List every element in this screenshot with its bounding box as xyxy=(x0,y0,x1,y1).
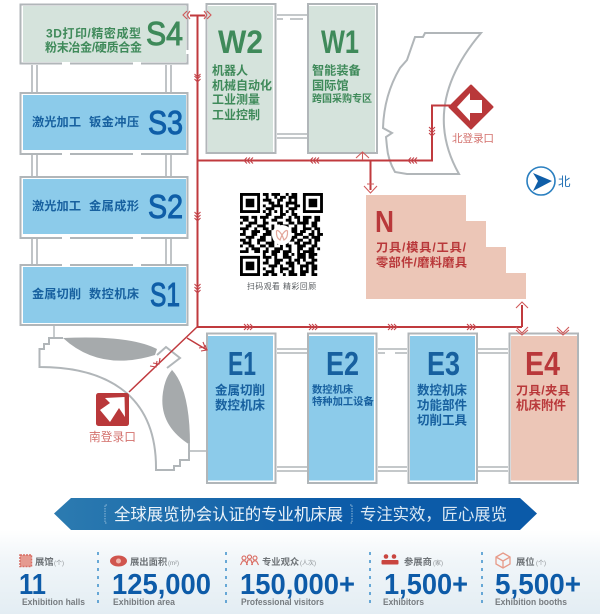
panel: hall S4: S4 xyxy=(146,15,183,52)
icon: halls xyxy=(20,555,32,566)
stat: exhibition area: 展出面积 xyxy=(130,556,168,567)
panel: hall S3: 钣金冲压 xyxy=(89,114,139,129)
panel: hall W1 xyxy=(308,4,377,153)
panel: hall S4: 粉末冶金/硬质合金 xyxy=(45,40,142,54)
panel: hall E3: E3 xyxy=(427,345,460,382)
stat: exhibition halls xyxy=(19,555,85,608)
panel: hall N: 刀具/模具/工具/ xyxy=(376,240,467,254)
icon: north entrance xyxy=(450,86,492,128)
panel: hall S1: 数控机床 xyxy=(89,286,139,301)
stat: professional visitors: 专业观众 xyxy=(262,556,299,567)
panel: hall W2: 机器人 xyxy=(212,62,248,78)
panel: hall E1: 数控机床 xyxy=(215,398,266,412)
panel: hall E4: 机床附件 xyxy=(516,398,567,412)
stat: professional visitors: Professional visitors xyxy=(241,597,324,608)
panel: hall W1: 跨国采购专区 xyxy=(312,92,372,105)
stat: professional visitors xyxy=(240,555,355,608)
stat: exhibition booths: 5,500+ xyxy=(495,569,581,601)
panel: hall N: 零部件/磨料磨具 xyxy=(376,254,467,270)
panel: hall W1: 智能装备 xyxy=(312,62,362,78)
panel: hall W2: 工业测量 xyxy=(212,92,260,106)
panel: hall S3: 激光加工 xyxy=(32,114,81,129)
icon: area xyxy=(110,556,127,566)
stat: exhibition booths xyxy=(495,553,581,608)
stat: exhibitors: 参展商 xyxy=(404,556,432,567)
stat: exhibition area: (m²) xyxy=(168,561,179,567)
stat: exhibitors: 1,500+ xyxy=(384,569,468,601)
stat: exhibition area xyxy=(110,556,211,608)
stat: exhibition halls: 展馆 xyxy=(35,556,54,567)
panel: hall S2 xyxy=(20,177,188,240)
QR code xyxy=(240,193,323,276)
panel: hall E3: 切削工具 xyxy=(417,412,468,428)
panel: hall S1 xyxy=(20,263,188,325)
stats background xyxy=(0,530,600,614)
label: north entrance: 北登录口 xyxy=(452,132,494,145)
divider xyxy=(98,552,482,608)
icon: south entrance xyxy=(96,393,129,426)
icon: booths xyxy=(496,553,510,568)
icon: visitors xyxy=(240,555,258,565)
red route lines xyxy=(129,15,522,392)
panel: hall S1: 金属切削 xyxy=(32,286,81,301)
panel: hall W2 xyxy=(206,4,276,153)
stat: exhibition halls: 11 xyxy=(19,569,46,601)
panel: hall E2: 特种加工设备 xyxy=(312,395,374,408)
stat: exhibition halls: Exhibition halls xyxy=(22,597,85,608)
panel: hall E2: E2 xyxy=(326,345,359,382)
route arrows xyxy=(150,11,569,367)
panel: hall S2: 金属成形 xyxy=(89,198,139,213)
label: south entrance: 南登录口 xyxy=(89,430,136,444)
panel: hall E3 xyxy=(408,334,477,483)
stat: exhibition booths: 展位 xyxy=(516,556,535,567)
stat: exhibitors: Exhibitors xyxy=(383,597,424,608)
panel: hall E1: 金属切削 xyxy=(215,382,265,398)
icon: compass north xyxy=(527,167,571,195)
panel: hall E4 xyxy=(510,334,578,483)
stat: exhibition booths: (个) xyxy=(536,560,546,567)
panel: hall W1: 国际馆 xyxy=(312,78,349,92)
panel: hall S3: S3 xyxy=(148,104,183,141)
banner: 专注实效，匠心展览 xyxy=(360,506,507,524)
stat: professional visitors: (人次) xyxy=(300,559,316,567)
panel: hall W1: W1 xyxy=(321,24,359,60)
stat: professional visitors: 150,000+ xyxy=(240,569,355,601)
hall connectors xyxy=(32,15,508,471)
icon: compass north: 北 xyxy=(558,175,571,189)
banner: 全球展览协会认证的专业机床展 xyxy=(114,506,343,524)
panel: hall E1 xyxy=(207,334,276,483)
panel: hall E3: 功能部件 xyxy=(417,398,468,412)
panel: hall W2: 机械自动化 xyxy=(212,78,272,92)
stat: exhibition area: 125,000 xyxy=(112,569,211,601)
panel: hall S2: S2 xyxy=(148,188,183,225)
icon: exhibitors xyxy=(382,554,398,564)
panel: hall W2: 工业控制 xyxy=(212,107,260,122)
panel: hall E1: E1 xyxy=(228,345,256,382)
panel: hall S4 xyxy=(20,4,190,66)
panel: hall E4: 刀具/夹具 xyxy=(516,382,570,398)
panel: hall E4: E4 xyxy=(525,345,561,382)
stat: exhibitors: (家) xyxy=(433,559,443,567)
panel: hall E2 xyxy=(308,334,376,483)
stat: exhibition halls: (个) xyxy=(54,560,64,567)
panel: hall E2: 数控机床 xyxy=(312,383,354,396)
north registration building xyxy=(383,33,481,174)
panel: hall N: N xyxy=(375,204,394,239)
panel: hall S3 xyxy=(20,93,188,156)
panel: hall N xyxy=(366,195,526,299)
banner xyxy=(54,498,537,530)
panel: hall E3: 数控机床 xyxy=(417,382,468,398)
stat: exhibition area: Exhibition area xyxy=(113,597,176,608)
panel: hall S1: S1 xyxy=(150,276,180,313)
stat: exhibitors xyxy=(382,554,468,608)
panel: hall W2: W2 xyxy=(218,24,263,60)
south registration building xyxy=(40,325,207,470)
stat: exhibition booths: Exhibition booths xyxy=(495,597,567,608)
panel: hall S4: 3D打印/精密成型 xyxy=(46,26,141,40)
QR caption: 扫码观看 精彩回顾 xyxy=(247,281,316,291)
panel: hall S2: 激光加工 xyxy=(32,198,81,213)
